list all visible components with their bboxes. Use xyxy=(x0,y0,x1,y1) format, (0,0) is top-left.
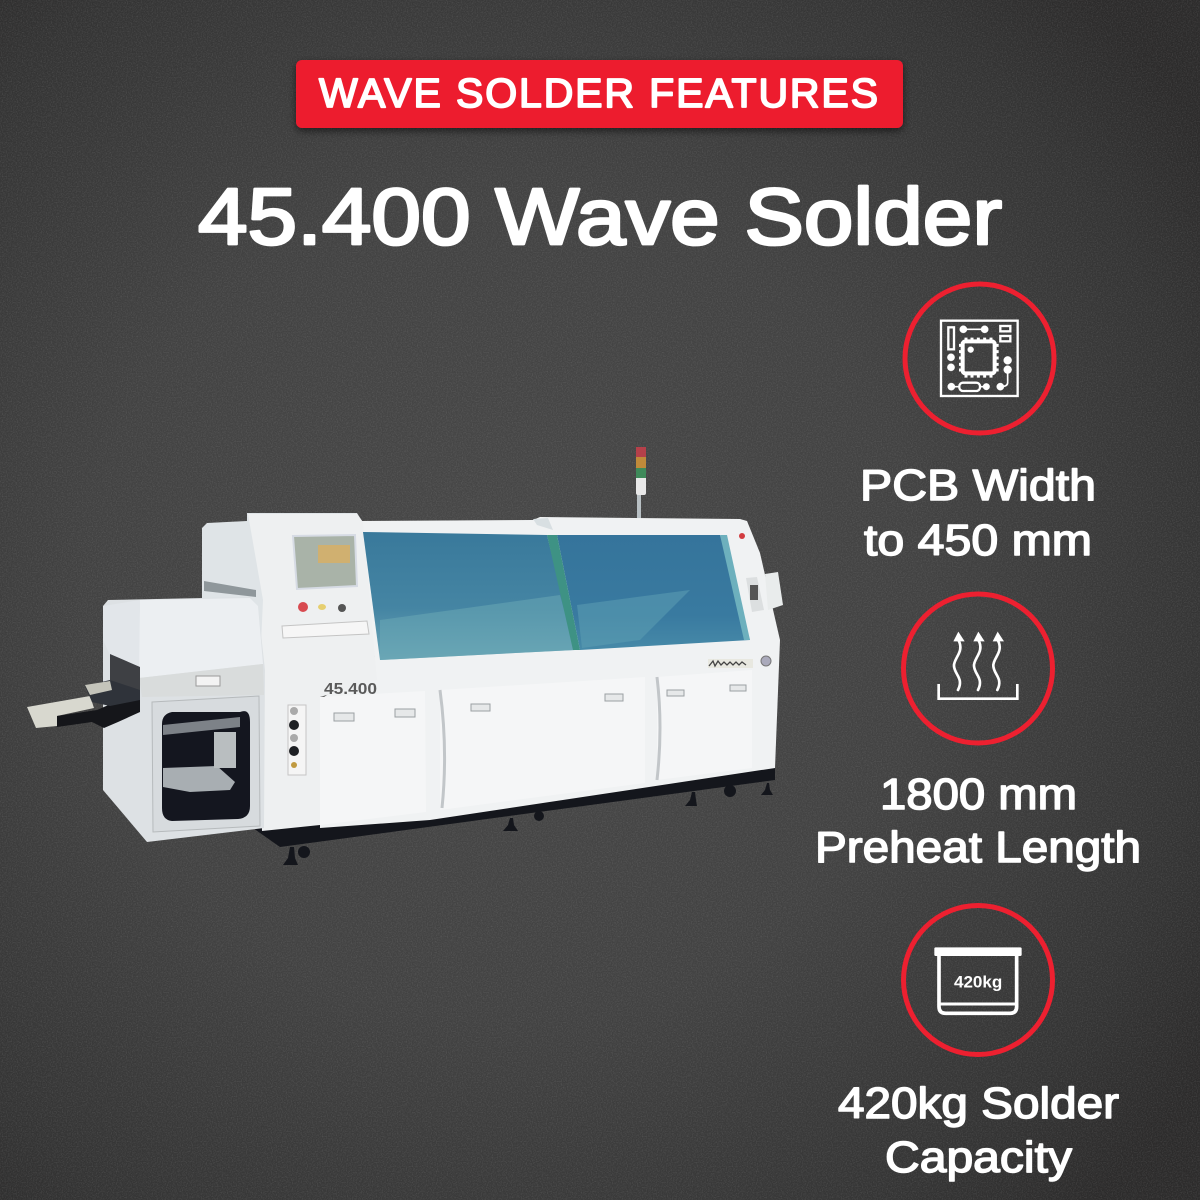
text: solder capacity: 420kg Solder xyxy=(838,1079,1119,1128)
main body xyxy=(320,517,780,828)
control tower xyxy=(248,514,377,831)
text: preheat length: 1800 mm xyxy=(880,770,1077,819)
text: PCB width xyxy=(860,461,1096,565)
icon: solder pot xyxy=(904,906,1052,1054)
title: 45.400 Wave Solder xyxy=(198,172,1002,261)
icon: solder pot: 420kg xyxy=(954,973,1002,991)
lower base xyxy=(250,768,775,847)
text: solder capacity xyxy=(838,1079,1119,1182)
conveyor arm xyxy=(27,680,140,728)
badge: wave solder features: WAVE SOLDER FEATURES xyxy=(319,70,878,116)
window: left glass xyxy=(363,532,575,660)
text: preheat length xyxy=(815,770,1141,872)
signal light tower xyxy=(636,447,646,520)
text: PCB width: PCB Width xyxy=(860,461,1096,510)
icon: heat xyxy=(904,594,1052,743)
text: preheat length: Preheat Length xyxy=(815,823,1141,872)
text: PCB width: to 450 mm xyxy=(864,516,1092,565)
feeder module xyxy=(103,597,265,842)
model number: 45.400 xyxy=(324,681,377,698)
lower doors xyxy=(320,670,752,825)
machine photo: wave solder xyxy=(27,447,783,865)
logo plate and panel details xyxy=(708,533,783,668)
window: right glass xyxy=(557,535,750,650)
text: solder capacity: Capacity xyxy=(885,1133,1072,1182)
feet xyxy=(283,783,773,865)
badge: wave solder features xyxy=(296,60,903,128)
control tower rear xyxy=(202,513,362,680)
icon: PCB xyxy=(905,284,1054,433)
